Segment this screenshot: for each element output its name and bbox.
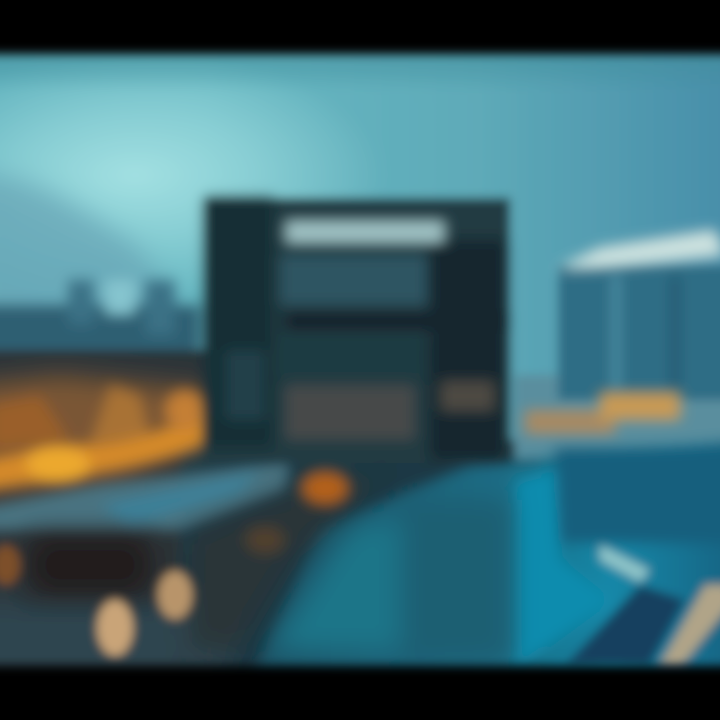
orange glow: left waterfront [0, 375, 215, 495]
right building with white roof [555, 230, 720, 400]
lower dark base [0, 350, 720, 690]
black bottom band [0, 666, 720, 720]
black top band [0, 0, 720, 54]
central dark building [205, 198, 510, 463]
sky background [0, 30, 720, 470]
water surface: right and centre [250, 440, 720, 680]
pier deck: left foreground [0, 462, 380, 650]
light path: lower right [565, 545, 720, 665]
foreground lights [0, 545, 192, 656]
distant hills and skyline [0, 175, 200, 360]
orange reflections: right shore [525, 392, 680, 434]
building facade detail [205, 198, 505, 460]
